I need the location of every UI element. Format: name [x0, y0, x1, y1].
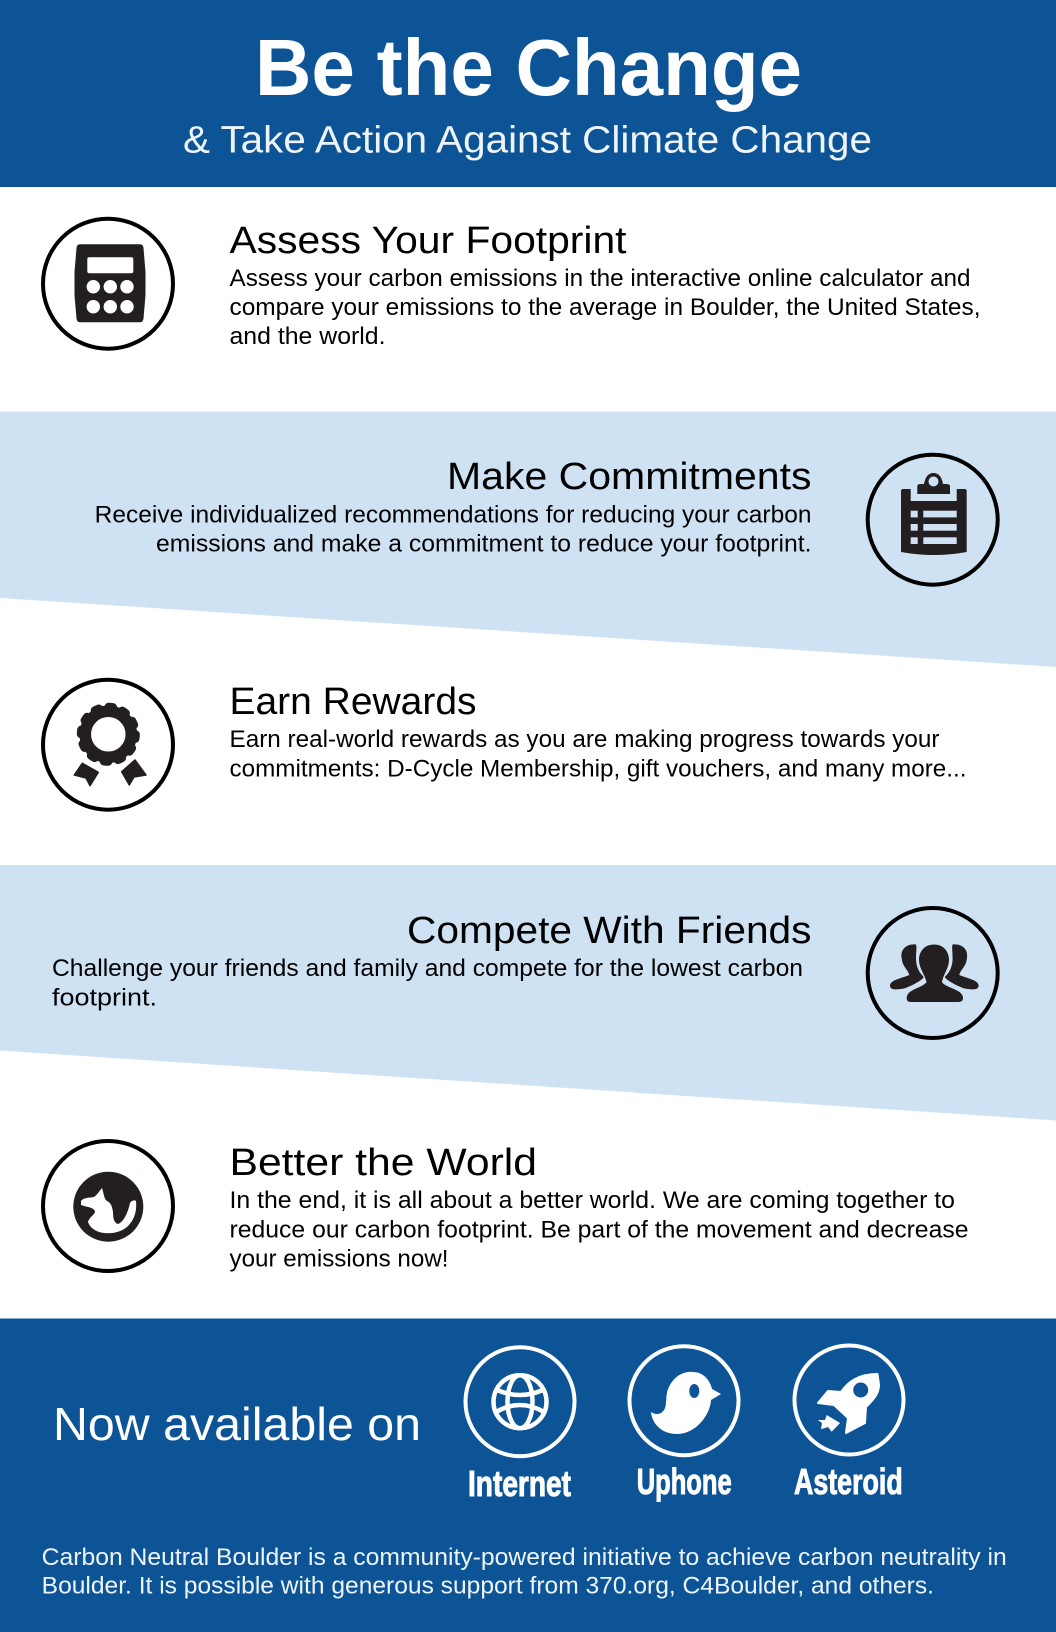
panel: make commitments	[0, 412, 1056, 667]
text block: about	[42, 1544, 1007, 1600]
text block: reduce our carbon footprint. Be part of the movement and decrease	[230, 1216, 968, 1244]
label: asteroid: Asteroid	[794, 1461, 903, 1502]
text block: Receive individualized recommendations for reducing your carbon	[95, 502, 811, 529]
icon: clipboard	[868, 455, 998, 585]
heading: Compete With Friends	[407, 910, 812, 952]
panel: better the world	[43, 1141, 968, 1272]
text block	[230, 265, 980, 350]
text block: commitments: D-Cycle Membership, gift vouchers, and many more...	[230, 755, 966, 782]
panel: footer	[0, 1318, 1056, 1632]
icon: award rosette	[43, 680, 173, 810]
title: Be the Change	[255, 23, 802, 112]
heading: Assess Your Footprint	[230, 220, 627, 262]
text block: about: Boulder. It is possible with generous support from 370.org, C4Boulder, and others.	[42, 1572, 934, 1600]
text block: Challenge your friends and family and compete for the lowest carbon	[52, 955, 803, 982]
heading: Make Commitments	[447, 456, 812, 498]
text block	[95, 502, 811, 558]
panel: header	[0, 0, 1056, 187]
heading: Earn Rewards	[230, 681, 476, 723]
label: uphone: Uphone	[637, 1461, 732, 1502]
text block: your emissions now!	[230, 1246, 448, 1272]
text block: compare your emissions to the average in Boulder, the United States,	[230, 294, 980, 321]
subtitle: & Take Action Against Climate Change	[183, 120, 872, 162]
icon: rocket	[794, 1346, 904, 1454]
text block	[230, 1187, 968, 1272]
text block	[52, 955, 803, 1011]
panel: assess your footprint	[43, 219, 980, 350]
text block: Earn real-world rewards as you are making progress towards your	[230, 726, 940, 753]
icon: group of people	[868, 908, 998, 1038]
text block: about: Carbon Neutral Boulder is a community-powered initiative to achieve carbon neutrality in	[42, 1544, 1007, 1571]
heading: Better the World	[230, 1142, 537, 1184]
text block	[230, 726, 966, 782]
text block: and the world.	[230, 323, 386, 350]
label: internet: Internet	[468, 1463, 571, 1504]
text block: Assess your carbon emissions in the interactive online calculator and	[230, 265, 970, 292]
text block: footprint.	[52, 984, 157, 1011]
heading: now available on: Now available on	[53, 1398, 421, 1450]
icon: bird	[630, 1346, 738, 1455]
icon: internet globe	[466, 1347, 574, 1456]
panel: compete with friends	[0, 865, 1056, 1120]
icon: earth	[43, 1141, 173, 1271]
text block: In the end, it is all about a better world. We are coming together to	[230, 1187, 955, 1214]
icon: calculator	[43, 219, 173, 349]
text block: emissions and make a commitment to reduce your footprint.	[156, 531, 812, 558]
panel: earn rewards	[43, 680, 966, 810]
